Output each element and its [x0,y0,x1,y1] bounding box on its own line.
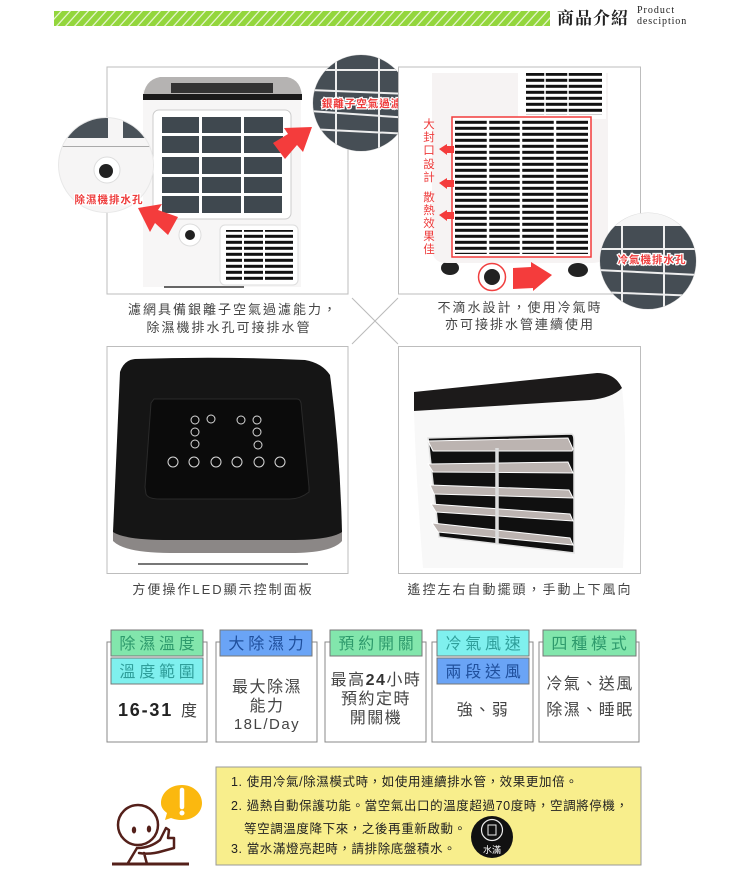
caption: filter [128,302,338,335]
note text [231,774,629,856]
body text: 預約定時 [341,690,411,708]
value: 強、弱 [457,701,509,719]
vertical label: 計 [423,170,435,184]
caption: LED panel: 方便操作LED顯示控制面板 [132,582,314,597]
icon: exclamation bubble [161,785,202,820]
panel: filter and drain [107,67,348,294]
note text: 2. 過熱自動保護功能。當空氣出口的溫度超過70度時，空調將停機， [231,798,629,813]
control icons [168,415,285,467]
zoom circle: drain hole [58,118,155,212]
caption: no drip: 亦可接排水管連續使用 [445,317,595,332]
control board [145,399,309,499]
mascot with exclamation bubble [112,785,202,864]
zoom circle: cooling drain [598,212,698,311]
vertical label: 熱 [423,204,435,217]
header: 預約開關 [338,635,418,653]
vertical label: 封 [423,130,435,144]
body text: 除濕、睡眠 [546,701,634,719]
figure [112,805,189,864]
red circle around drain [478,264,506,290]
note text: 1. 使用冷氣/除濕模式時，如使用連續排水管，效果更加倍。 [231,774,578,789]
panel: rear vent [398,67,640,294]
heading: product description: 商品介紹 [557,9,629,28]
vertical label: 效 [423,216,435,230]
label: silver ion: 銀離子空氣過濾 [322,97,402,110]
unit body [143,90,301,287]
upper vent [518,72,606,119]
vertical label: 設 [423,157,435,171]
subheader: 兩段送風 [445,663,525,681]
vertical label: 佳 [423,242,435,256]
panel: control panel [107,346,348,574]
icon: water full: 水滿 [483,844,501,855]
body text: 最高24小時 [331,671,421,689]
label: cooling drain: 冷氣機排水孔 [618,253,686,266]
icon: water full [471,816,513,858]
body text: 最大除濕 [232,678,302,696]
vertical label: 大 [423,117,435,131]
vertical label: 口 [423,145,435,157]
header: 除濕溫度 [119,635,199,653]
caption: filter: 濾網具備銀離子空氣過濾能力， [128,302,338,317]
panel: swing louvers [398,346,640,574]
zoom circle: silver ion filter [312,54,398,152]
lower vent [220,225,298,285]
subheader: 溫度範圍 [119,662,199,681]
value: 度 [181,702,197,720]
note text: 3. 當水滿燈亮起時，請排除底盤積水。 [231,841,456,856]
arrow: to filter zoom [273,127,312,159]
wheels [441,261,588,285]
grey band [113,530,342,553]
header: 四種模式 [551,635,631,653]
feature box: modes [539,630,639,742]
body text: 開關機 [350,709,402,727]
feature box: timer [325,630,426,742]
filter grid [153,110,291,219]
vertical label [423,117,435,256]
cross divider [352,298,398,344]
black top band [414,373,622,411]
main red-framed louvers [452,117,591,257]
label: drain hole: 除濕機排水孔 [74,193,144,206]
header stripe [54,11,550,26]
lower trim [138,563,308,565]
header: 大除濕力 [228,635,308,653]
note box [216,767,641,865]
body text [331,671,421,727]
top cap [143,77,302,100]
unit body [414,388,625,568]
caption: swing: 遙控左右自動擺頭，手動上下風向 [407,582,633,597]
eyes [132,826,151,834]
vertical label: 散 [423,190,435,204]
arrow: right [513,262,552,291]
feature box: fan speed [432,630,533,742]
feature box: temperature [107,630,207,742]
body text: 冷氣、送風 [546,675,634,693]
value [118,700,197,720]
feature box: dehumidify [216,630,317,742]
arrow: to drain zoom [138,204,178,235]
body text [232,678,302,733]
body text [546,675,634,719]
value: 16-31 [118,700,173,720]
header: 冷氣風速 [445,635,525,653]
caption: filter: 除濕機排水孔可接排水管 [146,320,312,335]
body text: 18L/Day [234,716,300,733]
caption: no drip: 不滴水設計，使用冷氣時 [437,300,603,315]
heading: product description [557,5,687,28]
side arrows [439,144,454,221]
note text: 等空調溫度降下來，之後再重新啟動。 [244,821,467,836]
drain knob [179,224,201,246]
rear body [432,73,608,263]
heading: product description: desciption [637,16,687,27]
black top [113,358,342,540]
body text: 能力 [249,697,285,715]
vertical label: 果 [423,230,435,243]
caption: no drip [437,300,603,332]
heading: product description: Product [637,5,675,16]
grille [428,434,574,553]
